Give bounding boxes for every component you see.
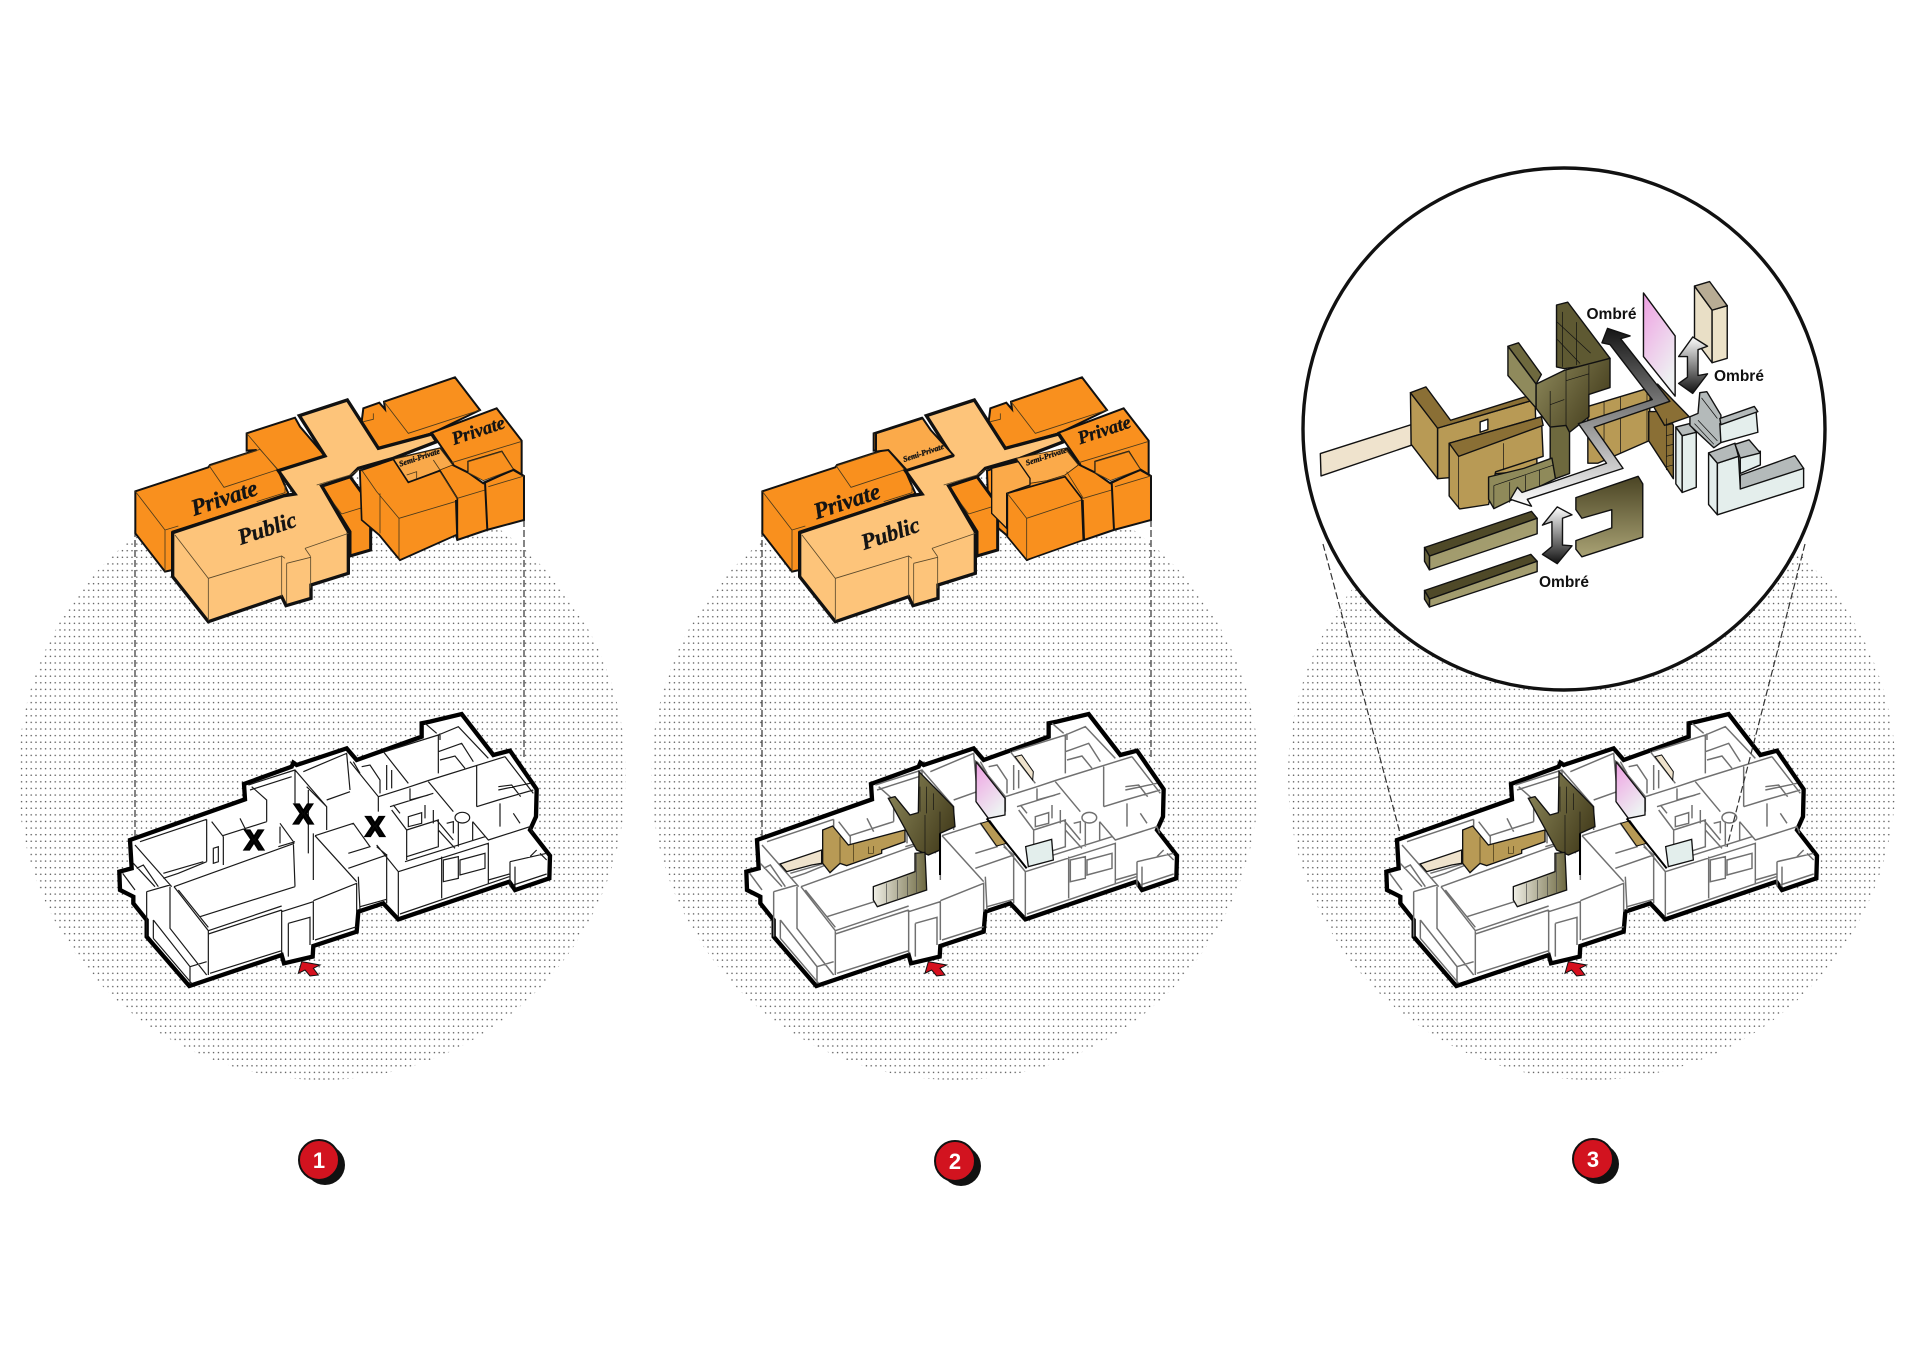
step badge 3: [1573, 1139, 1619, 1184]
stipple circle 3: [1288, 556, 1895, 1080]
step badge 2: [935, 1141, 981, 1186]
projection lines panel 3: [1323, 544, 1805, 847]
panel 2: program massing: [762, 377, 1151, 622]
massing labels panel 2: Semi-Private: [1024, 445, 1068, 468]
step badge 1: 1: [313, 1148, 325, 1173]
panel 1: program massing: [135, 377, 524, 622]
massing labels panel 2: Private: [809, 479, 884, 525]
step badge 3: 3: [1587, 1147, 1599, 1172]
massing labels panel 2: [809, 412, 1134, 555]
stipple circle 1: [18, 472, 626, 1080]
panel 3: exploded detail inset: [1303, 168, 1825, 690]
Ombré labels: Ombré: [1714, 368, 1764, 385]
massing labels panel 1: Semi-Private: [398, 446, 441, 469]
massing labels panel 2: Semi-Private: [902, 442, 945, 464]
floor plan panel 2: [746, 714, 1177, 986]
removed walls X marks: X: [245, 824, 264, 855]
projection lines panel 1: [135, 520, 524, 842]
Ombré labels: Ombré: [1539, 574, 1589, 591]
Ombré labels: [1539, 306, 1764, 591]
massing labels panel 2: Public: [857, 512, 923, 555]
inserted elements panel 2: [780, 755, 1053, 907]
removed walls X marks: X: [294, 798, 313, 829]
massing details: [360, 448, 524, 560]
massing labels panel 2: Private: [1074, 412, 1134, 449]
exploded elements: [1320, 282, 1804, 607]
massing labels panel 1: [187, 412, 508, 550]
Ombré labels: Ombré: [1586, 306, 1637, 323]
massing labels panel 1: Private: [448, 412, 508, 450]
step badge 2: 2: [949, 1149, 961, 1174]
inset circle: [1303, 168, 1825, 690]
removed walls X marks: [245, 798, 385, 855]
massing labels panel 1: Private: [187, 475, 261, 522]
floor plan panel 1: [119, 714, 550, 986]
projection lines panel 2: [762, 520, 1151, 842]
floor plan panel 3: [1386, 714, 1817, 986]
removed walls X marks: X: [366, 811, 385, 842]
stipple circle 2: [651, 472, 1259, 1080]
entry arrow panel 3: [1565, 962, 1587, 976]
inserted elements panel 3: [1420, 755, 1693, 907]
massing details: [876, 418, 1151, 560]
entry arrow panel 2: [925, 962, 947, 976]
entry arrow panel 1: [298, 962, 320, 976]
massing labels panel 1: Public: [233, 507, 300, 550]
step badge 1: [299, 1140, 345, 1185]
